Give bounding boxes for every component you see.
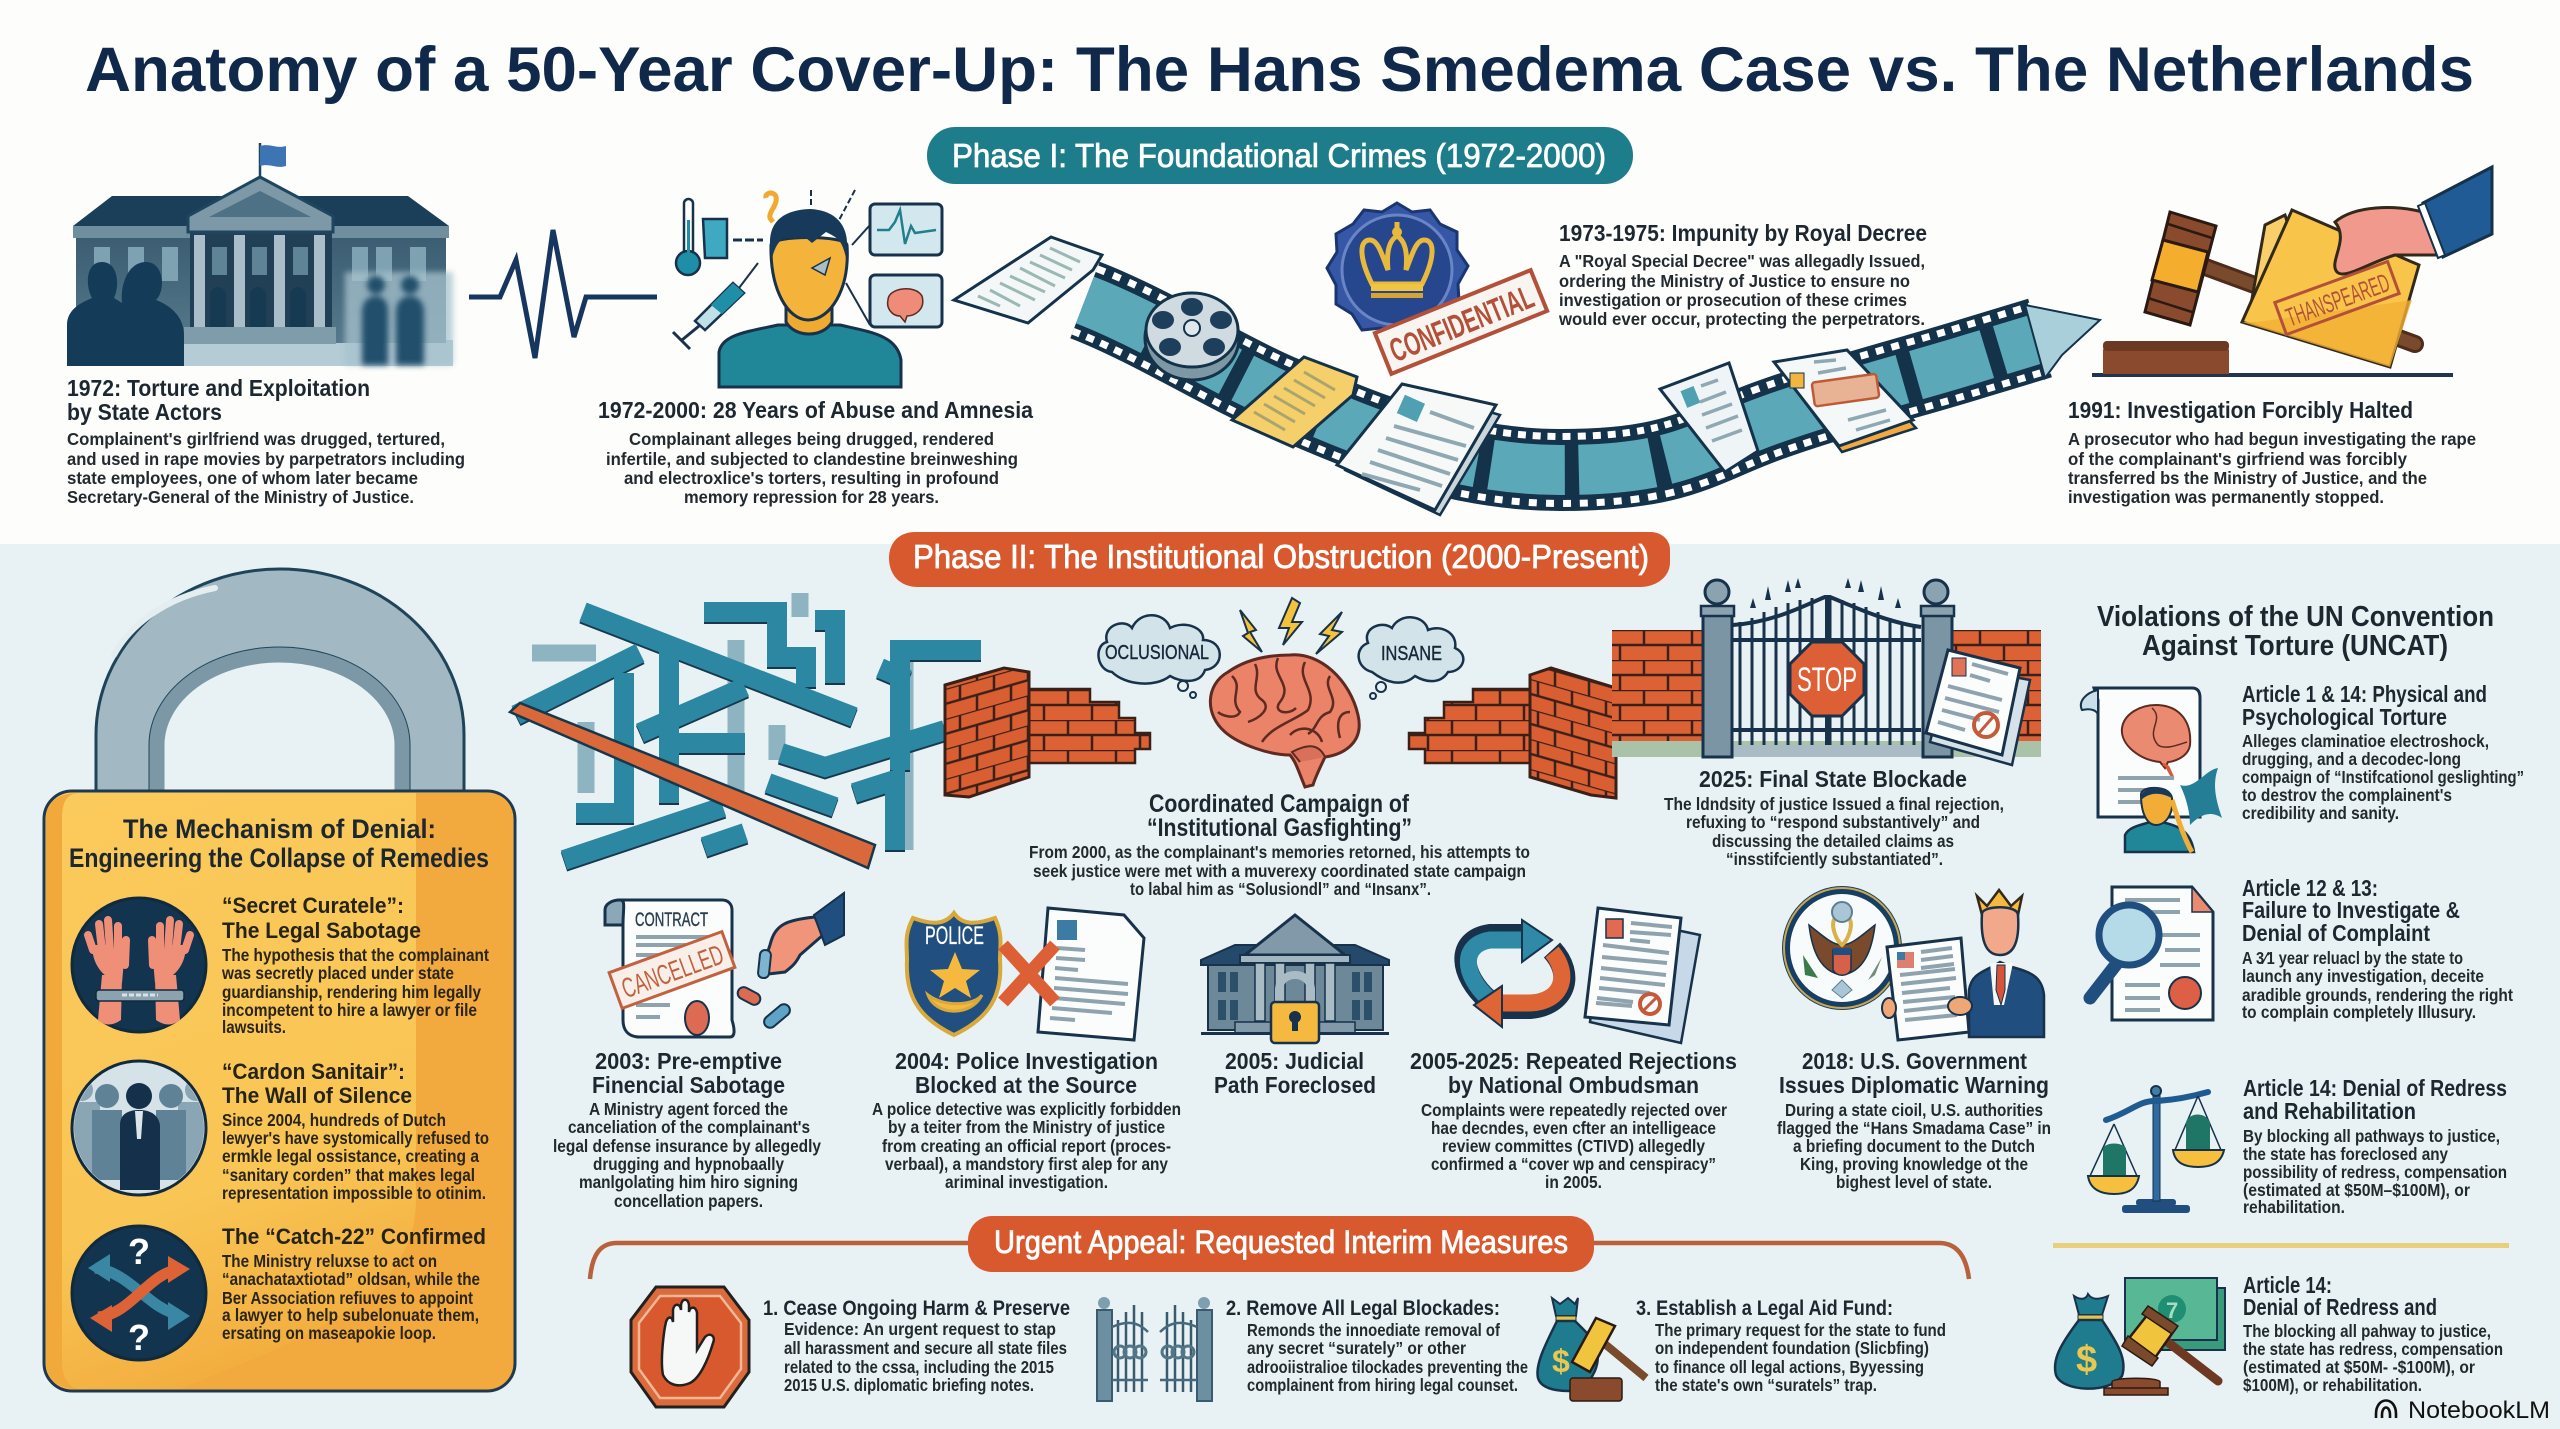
text block: 2003 financial sabotage bbox=[553, 1048, 821, 1211]
article 12 and 13: A 3⁄1 year reluacl by the state to bbox=[2242, 948, 2463, 968]
text block: 2004 police investigation: Blocked at the Source bbox=[915, 1072, 1137, 1098]
text block: 1973-1975 royal decree: investigation or prosecution of these crimes bbox=[1559, 290, 1907, 310]
item: secret curatele: was secretly placed under state bbox=[221, 963, 454, 983]
text block: institutional gaslighting bbox=[1029, 790, 1530, 899]
text block: 1991 investigation halted: investigation was permanently stopped. bbox=[2068, 487, 2384, 507]
text block: 2018 diplomatic warning bbox=[1777, 1048, 2051, 1192]
text block: institutional gaslighting: seek justice were met with a muverexy coordinated state campaign bbox=[1033, 861, 1526, 881]
text block: 1991 investigation halted: of the complainant's girfriend was forcibly bbox=[2068, 449, 2407, 469]
article 12 and 13: Article 12 & 13: bbox=[2242, 875, 2378, 901]
article 14 denial of redress: Denial of Redress and bbox=[2243, 1294, 2437, 1320]
icon: row of suited men bbox=[62, 1061, 216, 1195]
page background: Phase II zone bbox=[0, 544, 2560, 1429]
text block: 2004 police investigation: from creating an official report (proces- bbox=[882, 1136, 1171, 1156]
icon: gavel, folder and hand bbox=[2092, 167, 2492, 375]
text block: 2018 diplomatic warning: a briefing document to the Dutch bbox=[1793, 1136, 2035, 1156]
article 14 redress and rehabilitation: By blocking all pathways to justice, bbox=[2243, 1126, 2500, 1146]
text block: measure 2: complainent from hiring legal counset. bbox=[1247, 1375, 1518, 1395]
icon: crossed arrows with question marks: ? bbox=[128, 1317, 150, 1358]
text block: 1973-1975 royal decree: 1973-1975: Impunity by Royal Decree bbox=[1559, 220, 1927, 246]
UNCAT heading bbox=[2097, 601, 2494, 662]
icon: cuffed hands bbox=[72, 898, 206, 1032]
thought cloud: insane bbox=[1359, 617, 1463, 699]
text block: 2018 diplomatic warning: During a state cioil, U.S. authorities bbox=[1785, 1100, 2043, 1120]
phase I banner bbox=[927, 127, 1633, 184]
text block: measure 3: on independent foundation (Slicbfing) bbox=[1655, 1338, 1929, 1358]
padlock shackle bbox=[96, 569, 464, 795]
item: secret curatele bbox=[221, 893, 489, 1037]
icon: document with magnifying glass bbox=[2090, 887, 2213, 1020]
item: cardon sanitair: representation impossible to otinim. bbox=[222, 1183, 486, 1203]
article 14 denial of redress: Article 14: bbox=[2243, 1272, 2332, 1298]
article 1 and 14: Psychological Torture bbox=[2242, 704, 2447, 730]
article 14 denial of redress: the state has redress, compensation bbox=[2243, 1339, 2503, 1359]
icon: patient with medical items bbox=[673, 190, 942, 387]
article 1 and 14: Alleges claminatioe electroshock, bbox=[2242, 731, 2489, 751]
text block: 2018 diplomatic warning: flagged the “Hans Smadama Case” in bbox=[1777, 1118, 2051, 1138]
item: cardon sanitair: “Cardon Sanitair”: bbox=[222, 1059, 405, 1084]
icon: crossed arrows with question marks: ? bbox=[128, 1231, 150, 1272]
text block: 1972-2000 abuse and amnesia: and electroxlice's torters, resulting in profound bbox=[624, 468, 999, 488]
text block: 1972-2000 abuse and amnesia bbox=[598, 397, 1033, 507]
text block: 1973-1975 royal decree: A "Royal Special Decree" was allegadly Issued, bbox=[1559, 251, 1925, 271]
watermark: NotebookLM: NotebookLM bbox=[2408, 1397, 2550, 1424]
text block: 2018 diplomatic warning: 2018: U.S. Government bbox=[1802, 1048, 2027, 1074]
text block: 1972 torture: and used in rape movies by parpetrators including bbox=[67, 449, 465, 469]
text block: measure 2: any secret “surately” or other bbox=[1247, 1338, 1466, 1358]
text block: 2003 financial sabotage: 2003: Pre-emptive bbox=[595, 1048, 782, 1074]
text block: institutional gaslighting: “Institutional Gasfighting” bbox=[1147, 814, 1412, 842]
padlock body bbox=[44, 791, 515, 1391]
illustration: locked gate with stop sign: STOP bbox=[1797, 661, 1857, 699]
article 14 denial of redress: The blocking all pahway to justice, bbox=[2243, 1321, 2491, 1341]
text block: institutional gaslighting: From 2000, as the complainant's memories retorned, his attempts to bbox=[1029, 842, 1530, 862]
icon: money bag and gavel: $ bbox=[1552, 1343, 1570, 1379]
text block: 2005 judicial path: Path Foreclosed bbox=[1214, 1072, 1376, 1098]
icon: loop arrows and rejected documents bbox=[1465, 908, 1700, 1043]
urgent appeal header bracket bbox=[590, 1243, 1969, 1279]
text block: 2025 final state blockade: discussing the detailed claims as bbox=[1712, 831, 1954, 851]
text block: 2005-2025 ombudsman: by National Ombudsman bbox=[1448, 1072, 1699, 1098]
text block: 2005-2025 ombudsman: review committes (CTIVD) allegedly bbox=[1442, 1136, 1705, 1156]
article 14 denial of redress: $100M), or rehabilitation. bbox=[2243, 1375, 2422, 1395]
text block: measure 3: to finance oll legal actions, Byyessing bbox=[1655, 1357, 1924, 1377]
icon: royal seal with confidential stamp: CONFIDENTIAL bbox=[1384, 278, 1539, 369]
text block: 2025 final state blockade bbox=[1664, 766, 2004, 869]
thought cloud: delusional bbox=[1098, 615, 1220, 698]
article 12 and 13: Denial of Complaint bbox=[2242, 920, 2430, 946]
illustration: right brick wall bbox=[1409, 668, 1616, 798]
text block: 1991 investigation halted: 1991: Investigation Forcibly Halted bbox=[2068, 397, 2413, 423]
text block: 1972 torture: 1972: Torture and Exploitation bbox=[67, 375, 370, 401]
text block: 2003 financial sabotage: legal defense insurance by allegedly bbox=[553, 1136, 821, 1156]
text block: 2025 final state blockade: “insstifciently substantiated”. bbox=[1726, 849, 1943, 869]
text block: measure 1: all harassment and secure all state files bbox=[784, 1338, 1067, 1358]
text block: 2003 financial sabotage: Finencial Sabotage bbox=[592, 1072, 785, 1098]
text block: measure 1: 2015 U.S. diplomatic briefing notes. bbox=[784, 1375, 1034, 1395]
padlock heading bbox=[69, 814, 489, 873]
text block: 2025 final state blockade: refuxing to “respond substantively” and bbox=[1686, 812, 1980, 832]
item: catch-22: The Ministry reluxse to act on bbox=[222, 1251, 437, 1271]
text block: 2018 diplomatic warning: King, proving knowledge ot the bbox=[1800, 1154, 2028, 1174]
icon: gavel, folder and hand: THANSPEARED bbox=[2282, 267, 2394, 332]
text block: 1972 torture: Complainent's girlfriend was drugged, tertured, bbox=[67, 429, 445, 449]
article 12 and 13: aradible grounds, rendering the right bbox=[2242, 985, 2513, 1005]
text block: measure 1: related to the cssa, including the 2015 bbox=[784, 1357, 1054, 1377]
title: Anatomy of a 50-Year Cover-Up: The Hans Smedema Case vs. The Netherlands bbox=[85, 35, 2474, 105]
article 14 redress and rehabilitation bbox=[2243, 1075, 2507, 1217]
text block: measure 3 bbox=[1636, 1297, 1946, 1395]
text block: measure 1 bbox=[763, 1297, 1070, 1395]
article 14 redress and rehabilitation: (estimated at $50M–$100M), or bbox=[2243, 1180, 2470, 1200]
article 1 and 14 bbox=[2242, 681, 2524, 823]
text block: 1991 investigation halted bbox=[2068, 397, 2476, 507]
text block: 1972-2000 abuse and amnesia: 1972-2000: 28 Years of Abuse and Amnesia bbox=[598, 397, 1033, 423]
text block: 2005-2025 ombudsman: Complaints were repeatedly rejected over bbox=[1421, 1100, 1727, 1120]
item: cardon sanitair: “sanitary corden” that makes legal bbox=[222, 1165, 475, 1185]
text block: 1973-1975 royal decree: would ever occur, protecting the perpetrators. bbox=[1558, 309, 1925, 329]
icon: money bag, cash and gavel: $ bbox=[2076, 1339, 2097, 1381]
phase II banner bbox=[889, 532, 1670, 587]
text block: 2004 police investigation: 2004: Police Investigation bbox=[895, 1048, 1158, 1074]
icon: police badge and blocked report bbox=[907, 908, 1144, 1040]
page background: Phase I zone bbox=[0, 0, 2560, 544]
article 12 and 13 bbox=[2242, 875, 2513, 1022]
icon: cancelled contract, pills and hand bbox=[605, 893, 844, 1037]
item: secret curatele: guardianship, rendering him legally bbox=[222, 982, 481, 1002]
text block: 2003 financial sabotage: canceliation of the complainant's bbox=[568, 1117, 810, 1137]
item: secret curatele: lawsuits. bbox=[222, 1017, 286, 1037]
text block: 2005 judicial path bbox=[1214, 1048, 1376, 1098]
item: catch-22 bbox=[222, 1224, 486, 1343]
text block: measure 2 bbox=[1226, 1297, 1528, 1395]
urgent appeal banner bbox=[968, 1216, 1594, 1272]
article 14 redress and rehabilitation: and Rehabilitation bbox=[2243, 1098, 2416, 1124]
text block: 2003 financial sabotage: concellation papers. bbox=[614, 1191, 763, 1211]
phase II banner: Phase II: The Institutional Obstruction (2000-Present) bbox=[913, 538, 1649, 575]
phase I banner: Phase I: The Foundational Crimes (1972-2000) bbox=[952, 137, 1606, 174]
illustration: film strip with documents bbox=[954, 237, 2100, 515]
icon: money bag and gavel bbox=[1537, 1298, 1646, 1401]
text block: 2005 judicial path: 2005: Judicial bbox=[1225, 1048, 1364, 1074]
padlock heading: The Mechanism of Denial: bbox=[123, 814, 436, 844]
text block: 2003 financial sabotage: A Ministry agent forced the bbox=[589, 1099, 788, 1119]
text block: 2004 police investigation: by a teiter from the Ministry of justice bbox=[888, 1117, 1165, 1137]
article 14 redress and rehabilitation: the state has foreclosed any bbox=[2243, 1144, 2448, 1164]
icon: government building with silhouettes bbox=[67, 143, 453, 366]
article 12 and 13: to complain completely Illusury. bbox=[2242, 1002, 2476, 1022]
text block: 1972-2000 abuse and amnesia: memory repression for 28 years. bbox=[684, 487, 939, 507]
text block: 2004 police investigation: ariminal investigation. bbox=[945, 1172, 1108, 1192]
text block: measure 3: The primary request for the state to fund bbox=[1655, 1320, 1946, 1340]
text block: 2005-2025 ombudsman: in 2005. bbox=[1545, 1172, 1602, 1192]
article 14 redress and rehabilitation: rehabilitation. bbox=[2243, 1197, 2345, 1217]
icon: stop hand bbox=[631, 1287, 749, 1407]
text block: 2018 diplomatic warning: bighest level of state. bbox=[1836, 1172, 1992, 1192]
UNCAT heading: Against Torture (UNCAT) bbox=[2142, 630, 2448, 662]
illustration: left brick wall bbox=[945, 668, 1150, 797]
icon: brain with labels bbox=[1210, 598, 1359, 787]
text block: 2005-2025 ombudsman: hae decndes, even cfter an intelligeace bbox=[1431, 1118, 1716, 1138]
icon: cancelled contract, pills and hand: CONTRACT bbox=[635, 910, 708, 931]
item: cardon sanitair: lewyer's have systomically refused to bbox=[222, 1128, 489, 1148]
icon: US seal, diplomat and crown bbox=[1784, 888, 2044, 1040]
text block: 1991 investigation halted: transferred bs the Ministry of Justice, and the bbox=[2068, 468, 2427, 488]
item: catch-22: a lawyer to help subelonuate them, bbox=[222, 1305, 479, 1325]
article 14 denial of redress bbox=[2243, 1272, 2503, 1395]
text block: 2004 police investigation bbox=[872, 1048, 1181, 1192]
icon: document with brain and distressed person bbox=[2081, 688, 2222, 852]
text block: measure 2: Remonds the innoediate removal of bbox=[1247, 1320, 1500, 1340]
icon: money bag, cash and gavel: 7 bbox=[2166, 1298, 2178, 1323]
text block: institutional gaslighting: to labal him as “Solusiondl” and “Insanx”. bbox=[1130, 879, 1431, 899]
thought cloud: insane: INSANE bbox=[1381, 643, 1442, 665]
text block: measure 2: adrooiistralioe tilockades preventing the bbox=[1247, 1357, 1528, 1377]
item: secret curatele: incompetent to hire a lawyer or file bbox=[222, 1000, 477, 1020]
text block: 1972 torture bbox=[67, 375, 465, 507]
icon: royal seal with confidential stamp bbox=[1327, 203, 1547, 374]
text block: 2003 financial sabotage: manlgolating him hiro signing bbox=[579, 1172, 798, 1192]
article 1 and 14: drugging, and a decodec-long bbox=[2242, 749, 2461, 769]
text block: 1972 torture: by State Actors bbox=[67, 399, 222, 425]
item: secret curatele: The hypothesis that the complainant bbox=[222, 945, 489, 965]
icon: scales of justice bbox=[2088, 1086, 2224, 1213]
text block: 2004 police investigation: verbaal), a mandstory first alep for any bbox=[885, 1154, 1168, 1174]
article 14 redress and rehabilitation: possibility of redress, compensation bbox=[2243, 1162, 2507, 1182]
text block: 1991 investigation halted: A prosecutor who had begun investigating the rape bbox=[2068, 429, 2476, 449]
text block: measure 1: 1. Cease Ongoing Harm & Preserve bbox=[763, 1297, 1070, 1320]
item: cardon sanitair: The Wall of Silence bbox=[222, 1083, 412, 1108]
text block: 2025 final state blockade: The ldndsity of justice Issued a final rejection, bbox=[1664, 794, 2004, 814]
item: catch-22: “anachataxtiotad” oldsan, while the bbox=[222, 1269, 480, 1289]
thought cloud: delusional: OCLUSIONAL bbox=[1105, 642, 1209, 664]
item: catch-22: The “Catch-22” Confirmed bbox=[222, 1224, 486, 1249]
article 1 and 14: credibility and sanity. bbox=[2242, 803, 2399, 823]
icon: money bag, cash and gavel bbox=[2055, 1278, 2225, 1395]
text block: 1972-2000 abuse and amnesia: Complainant alleges being drugged, rendered bbox=[629, 429, 994, 449]
padlock heading: Engineering the Collapse of Remedies bbox=[69, 843, 489, 873]
panel: UN convention violations bbox=[2053, 601, 2524, 1395]
text block: 1972 torture: state employees, one of whom later became bbox=[67, 468, 418, 488]
icon: pulse line bbox=[469, 230, 657, 358]
text block: 1972-2000 abuse and amnesia: infertile, and subjected to clandestine breinweshing bbox=[606, 449, 1018, 469]
illustration: maze with barred route bbox=[510, 593, 981, 868]
item: catch-22: Ber Association refiuves to appoint bbox=[222, 1288, 473, 1308]
icon: broken gate with chain bbox=[1097, 1297, 1212, 1401]
text block: 2005-2025 ombudsman: 2005-2025: Repeated Rejections bbox=[1410, 1048, 1737, 1074]
item: cardon sanitair: ermkle legal ossistance, creating a bbox=[222, 1146, 479, 1166]
urgent appeal banner: Urgent Appeal: Requested Interim Measures bbox=[994, 1224, 1568, 1260]
icon: courthouse with padlock bbox=[1201, 915, 1389, 1043]
text block: measure 2: 2. Remove All Legal Blockades: bbox=[1226, 1297, 1500, 1320]
text block: 2025 final state blockade: 2025: Final State Blockade bbox=[1699, 766, 1967, 792]
item: cardon sanitair: Since 2004, hundreds of Dutch bbox=[222, 1110, 446, 1130]
icon: crossed arrows with question marks bbox=[72, 1226, 206, 1360]
item: cardon sanitair bbox=[222, 1059, 489, 1203]
article 12 and 13: launch any investigation, deceite bbox=[2242, 966, 2484, 986]
item: secret curatele: The Legal Sabotage bbox=[222, 918, 421, 943]
text block: 2003 financial sabotage: drugging and hypnobaally bbox=[593, 1154, 784, 1174]
item: catch-22: ersating on maseapokie loop. bbox=[222, 1323, 436, 1343]
illustration: locked gate with stop sign bbox=[1612, 578, 2041, 765]
article 1 and 14: to destrov the complainent's bbox=[2242, 785, 2452, 805]
panel: padlock mechanism of denial bbox=[44, 569, 515, 1391]
text block: 2005-2025 ombudsman bbox=[1410, 1048, 1737, 1192]
article 14 denial of redress: (estimated at $50M- -$100M), or bbox=[2243, 1357, 2475, 1377]
item: secret curatele: “Secret Curatele”: bbox=[222, 893, 404, 918]
text block: institutional gaslighting: Coordinated Campaign of bbox=[1149, 790, 1410, 818]
text block: 1972 torture: Secretary-General of the Ministry of Justice. bbox=[67, 487, 414, 507]
text block: measure 3: 3. Establish a Legal Aid Fund: bbox=[1636, 1297, 1893, 1320]
article 14 redress and rehabilitation: Article 14: Denial of Redress bbox=[2243, 1075, 2507, 1101]
text block: measure 1: Evidence: An urgent request to stap bbox=[784, 1319, 1056, 1339]
text block: measure 3: the state's own “suratels” trap. bbox=[1655, 1375, 1877, 1395]
article 1 and 14: Article 1 & 14: Physical and bbox=[2242, 681, 2487, 707]
text block: 1973-1975 royal decree bbox=[1558, 220, 1927, 329]
icon: police badge and blocked report: POLICE bbox=[925, 922, 984, 950]
UNCAT heading: Violations of the UN Convention bbox=[2097, 601, 2494, 633]
text block: 2018 diplomatic warning: Issues Diplomatic Warning bbox=[1779, 1072, 2049, 1098]
article 12 and 13: Failure to Investigate & bbox=[2242, 897, 2460, 923]
text block: 2005-2025 ombudsman: confirmed a “cover wp and censpiracy” bbox=[1431, 1154, 1716, 1174]
icon: cancelled contract, pills and hand: CANCELLED bbox=[617, 939, 728, 1004]
text block: 1973-1975 royal decree: ordering the Ministry of Justice to ensure no bbox=[1559, 271, 1910, 291]
text block: 2004 police investigation: A police detective was explicitly forbidden bbox=[872, 1099, 1181, 1119]
